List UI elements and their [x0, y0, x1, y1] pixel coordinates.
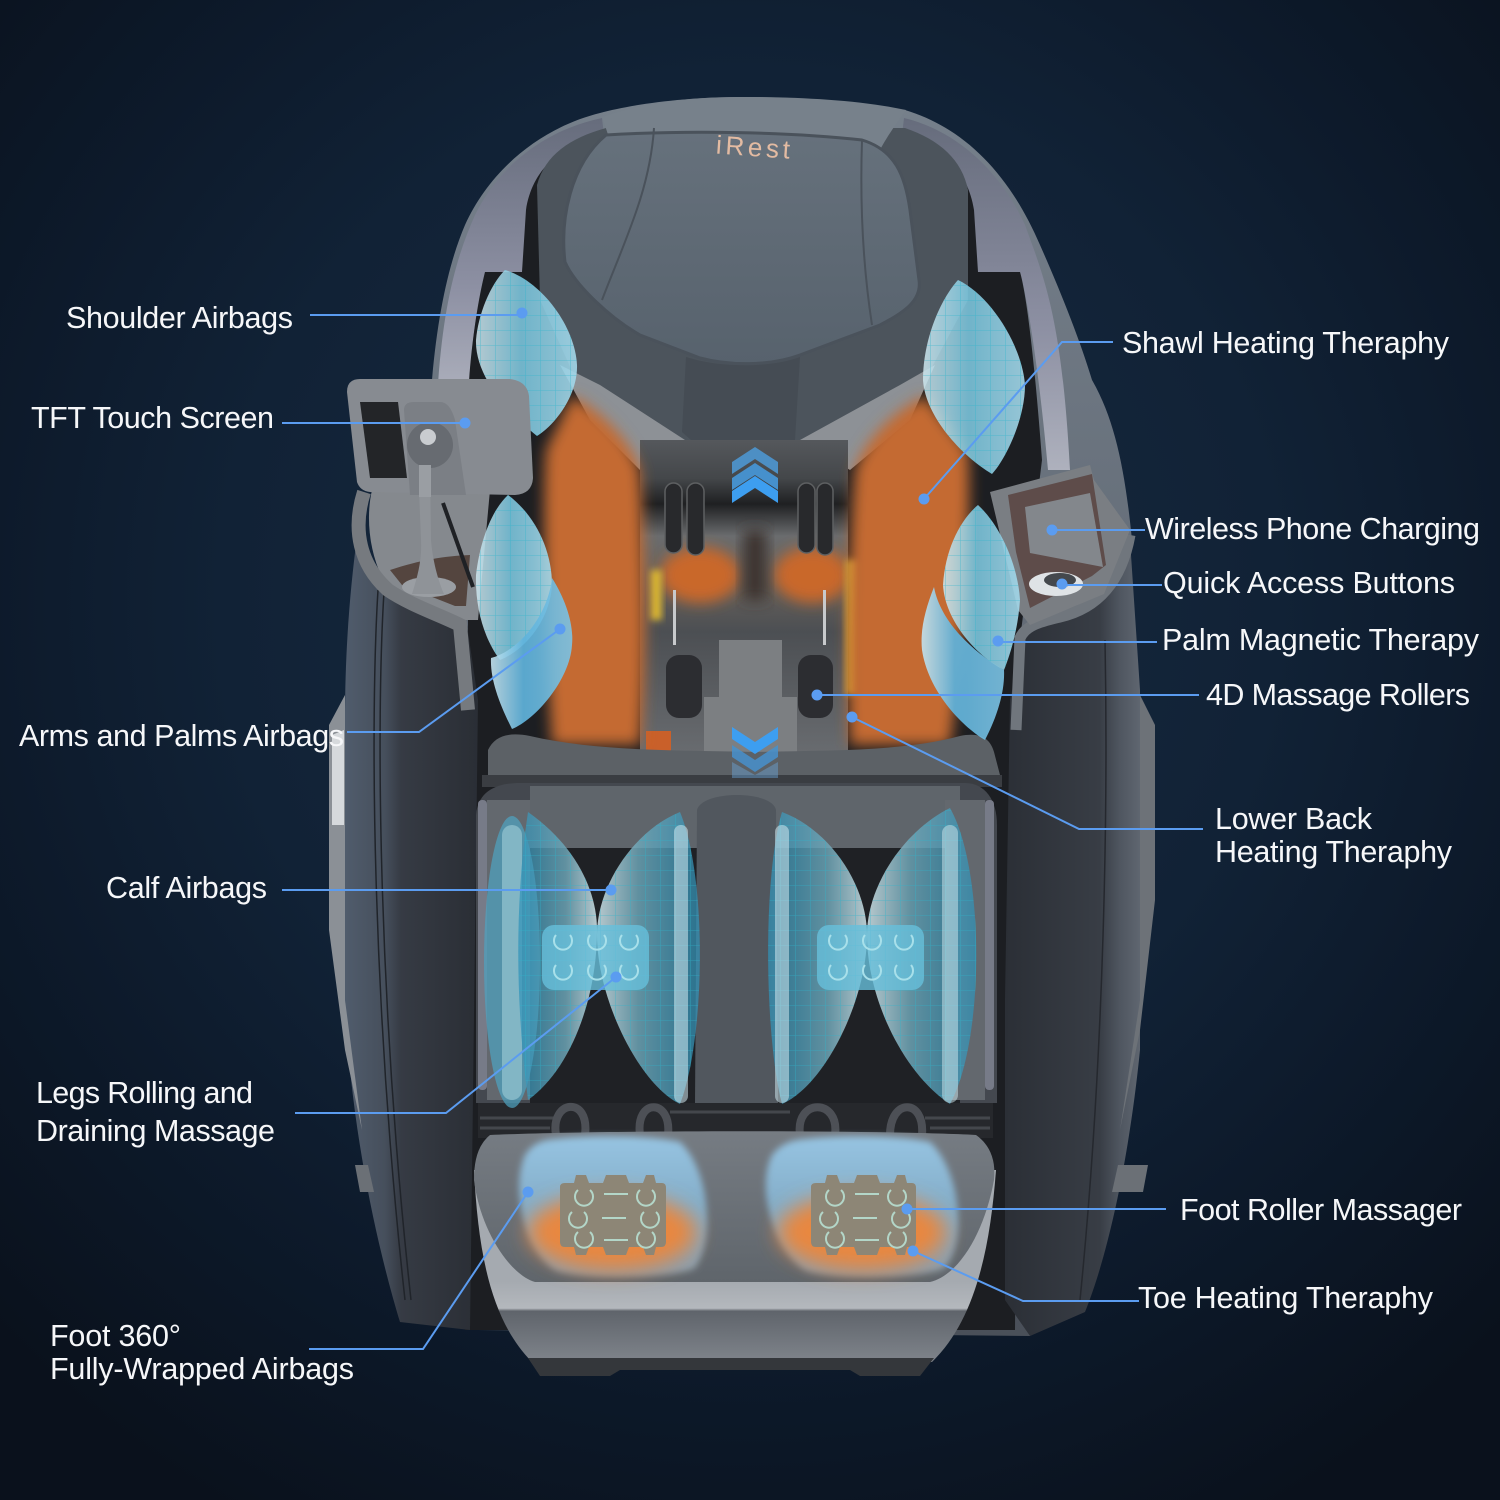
right leg roller [817, 925, 924, 990]
touch screen stand base [402, 577, 456, 597]
right shawl heating pad [848, 396, 969, 745]
quick access dial [1029, 572, 1083, 596]
label: Foot 360 Fully-Wrapped Airbags [50, 1319, 354, 1386]
left calf airbags [484, 812, 700, 1108]
label: Foot 360 Fully-Wrapped Airbags: Fully-Wrapped Airbags [50, 1352, 354, 1386]
leg massager frame [476, 783, 997, 1103]
label: Quick Access Buttons: Quick Access Buttons [1163, 566, 1455, 600]
label: Arms and Palms Airbags: Arms and Palms Airbags [19, 719, 344, 753]
right foot well [766, 1136, 958, 1277]
heat glow left of spine [660, 547, 740, 603]
touch screen remote [347, 379, 533, 495]
label: Calf Airbags: Calf Airbags [106, 871, 267, 905]
label: Legs Rolling and Draining Massage: Legs Rolling and [36, 1076, 253, 1110]
label: Legs Rolling and Draining Massage [36, 1076, 275, 1148]
callout lines [282, 315, 1203, 1349]
left arm stitching [374, 590, 411, 1300]
down arrows [732, 727, 778, 778]
left frame silver edge [478, 800, 487, 1090]
label: Lower Back Heating Theraphy [1215, 802, 1453, 869]
label: Lower Back Heating Theraphy: Heating Theraphy [1215, 835, 1453, 869]
left console window [369, 490, 490, 620]
left vertical rod [673, 590, 676, 645]
right vertical rod [823, 590, 826, 645]
label: 4D Massage Rollers: 4D Massage Rollers [1206, 678, 1470, 712]
right silver rail [902, 118, 1070, 470]
right control console [990, 465, 1130, 625]
left leg roller [542, 925, 649, 990]
label: Toe Heating Theraphy: Toe Heating Theraphy [1138, 1281, 1434, 1315]
lower side trims [355, 1165, 1148, 1192]
callout dots [460, 308, 1068, 1256]
small orange marker [646, 731, 671, 751]
label: Foot 360 Fully-Wrapped Airbags: Foot 360° [50, 1319, 181, 1353]
lower massage rollers [666, 655, 833, 718]
left arm airbags [476, 495, 572, 729]
label: Wireless Phone Charging: Wireless Phone Charging [1145, 512, 1480, 546]
right arm stitching [1080, 640, 1106, 1300]
label: TFT Touch Screen: TFT Touch Screen [31, 401, 274, 435]
label: Shawl Heating Theraphy: Shawl Heating Theraphy [1122, 326, 1450, 360]
chair outer shell [420, 97, 1132, 1336]
label: Lower Back Heating Theraphy: Lower Back [1215, 802, 1373, 836]
console brown surround [1008, 474, 1106, 608]
label: Foot Roller Massager: Foot Roller Massager [1180, 1193, 1462, 1227]
headrest top strip [602, 97, 906, 150]
footrest lower body [474, 1170, 996, 1362]
brand logo: iRest [715, 130, 792, 165]
right armrest [1005, 540, 1140, 1336]
left arm piping [359, 492, 468, 710]
left panel highlight [332, 730, 344, 825]
right arm piping [1016, 535, 1130, 730]
lower back silver trim [560, 365, 935, 470]
left silver outer panel [329, 695, 362, 1130]
seat back side panels [537, 128, 968, 440]
label: Palm Magnetic Therapy: Palm Magnetic Therapy [1162, 623, 1480, 657]
centre calf divider [695, 795, 778, 1104]
right arm airbags [922, 505, 1020, 740]
stand stem over screen [419, 465, 431, 497]
instruction label [360, 402, 407, 478]
footrest laces area [478, 1103, 993, 1138]
centre roller column [640, 440, 860, 760]
left shawl heating pad [544, 396, 645, 745]
phone charging pad [1025, 493, 1103, 567]
right calf airbags [768, 808, 976, 1104]
left console wood [390, 555, 470, 606]
centre lower head panel [682, 357, 800, 448]
upper massage rollers [665, 483, 833, 555]
dark chair interior [465, 132, 1042, 1330]
left armrest [345, 537, 478, 1330]
dark spine shadow [743, 530, 767, 600]
right foot roller [811, 1175, 916, 1255]
right silver outer panel [1120, 695, 1155, 1130]
left foot heat glow [528, 1194, 696, 1270]
footrest top surface [474, 1131, 994, 1282]
left foot well [519, 1136, 707, 1277]
lower centre plate [704, 640, 797, 752]
right frame silver edge [985, 800, 994, 1090]
seat cushion [488, 734, 1000, 775]
left foot roller [560, 1175, 666, 1255]
knob recess [404, 402, 466, 495]
joystick knob [407, 422, 453, 468]
left shoulder airbag [476, 270, 577, 436]
left silver rail [437, 118, 604, 400]
touch screen cable [443, 503, 473, 587]
yellow glow right [846, 560, 860, 695]
right shoulder airbag [923, 280, 1025, 474]
touch screen stand [412, 465, 444, 594]
seat bottom edge [482, 775, 1002, 787]
yellow glow left [650, 570, 662, 620]
calf outer gray columns [487, 800, 985, 1100]
foot vents [528, 1358, 934, 1376]
head cushion seams [602, 128, 872, 325]
up arrows [732, 447, 778, 503]
label: Shoulder Airbags: Shoulder Airbags [66, 301, 293, 335]
label: Legs Rolling and Draining Massage: Draining Massage [36, 1114, 275, 1148]
heat glow right of spine [774, 547, 850, 603]
black calf recess [530, 848, 960, 1104]
massage chair [329, 97, 1155, 1376]
right foot heat glow [778, 1194, 946, 1270]
knob highlight [420, 429, 436, 445]
top calf pad [530, 786, 960, 848]
head cushion [564, 132, 919, 364]
